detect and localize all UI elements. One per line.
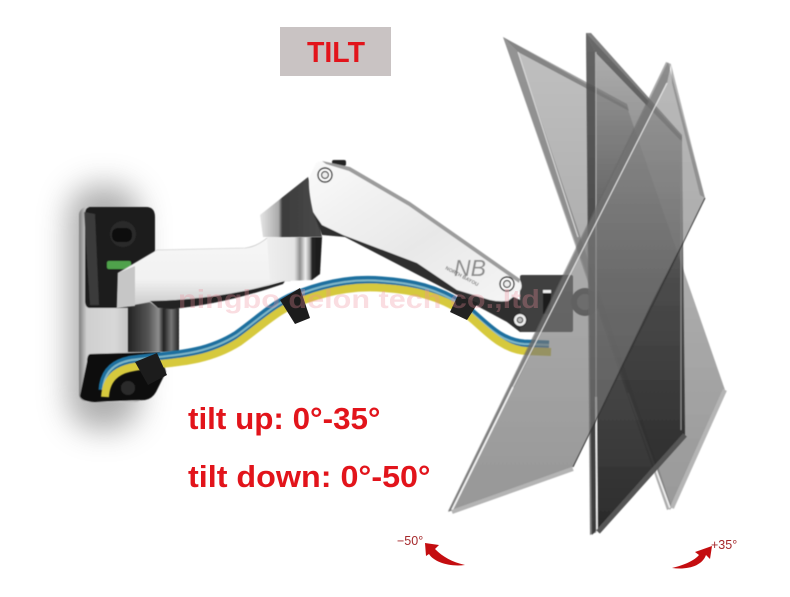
upper black plate	[85, 207, 155, 308]
title badge: TILT: TILT	[307, 37, 365, 69]
arrow: +35 degrees	[672, 538, 737, 568]
watermark: ningbo delon tech co.,ltd	[178, 284, 540, 314]
ball joint	[571, 288, 599, 316]
lower arm	[117, 236, 322, 309]
label: tilt up range: tilt up: 0°-35	[188, 401, 368, 436]
cable clip middle	[280, 288, 310, 324]
label: +35: +35°	[711, 538, 737, 552]
NB logo	[444, 255, 486, 288]
lower black bracket	[80, 352, 166, 402]
cable clip left	[135, 353, 167, 385]
wall shadow	[68, 185, 140, 430]
cable clip right	[450, 295, 478, 320]
mount bracket	[520, 275, 573, 332]
NB logo: NORTH BAYOU	[444, 265, 480, 288]
pivot screw top	[318, 168, 332, 182]
monitor: tilted down panel	[503, 37, 725, 510]
arm column near wall	[128, 300, 179, 352]
top cap	[332, 160, 346, 166]
title badge: TILT	[280, 27, 391, 76]
elbow column	[267, 237, 322, 281]
wall plate	[79, 207, 166, 402]
label: tilt down range: tilt down: 0°-50	[188, 459, 418, 494]
label: tilt up range: °	[368, 401, 380, 436]
keyhole	[110, 221, 136, 247]
arrow: -50 degrees	[397, 534, 465, 565]
green latch	[107, 261, 131, 269]
cables	[103, 280, 551, 397]
NB logo: NB	[454, 255, 486, 281]
upper arm wedge	[260, 177, 322, 237]
pivot screw lower	[514, 314, 526, 326]
label: tilt down range: °	[418, 459, 430, 494]
monitor: tilted up panel	[448, 62, 705, 512]
pivot screw right	[500, 277, 514, 291]
monitor: vertical panel	[586, 33, 685, 535]
upper arm	[309, 160, 599, 332]
label: -50: −50°	[397, 534, 423, 548]
